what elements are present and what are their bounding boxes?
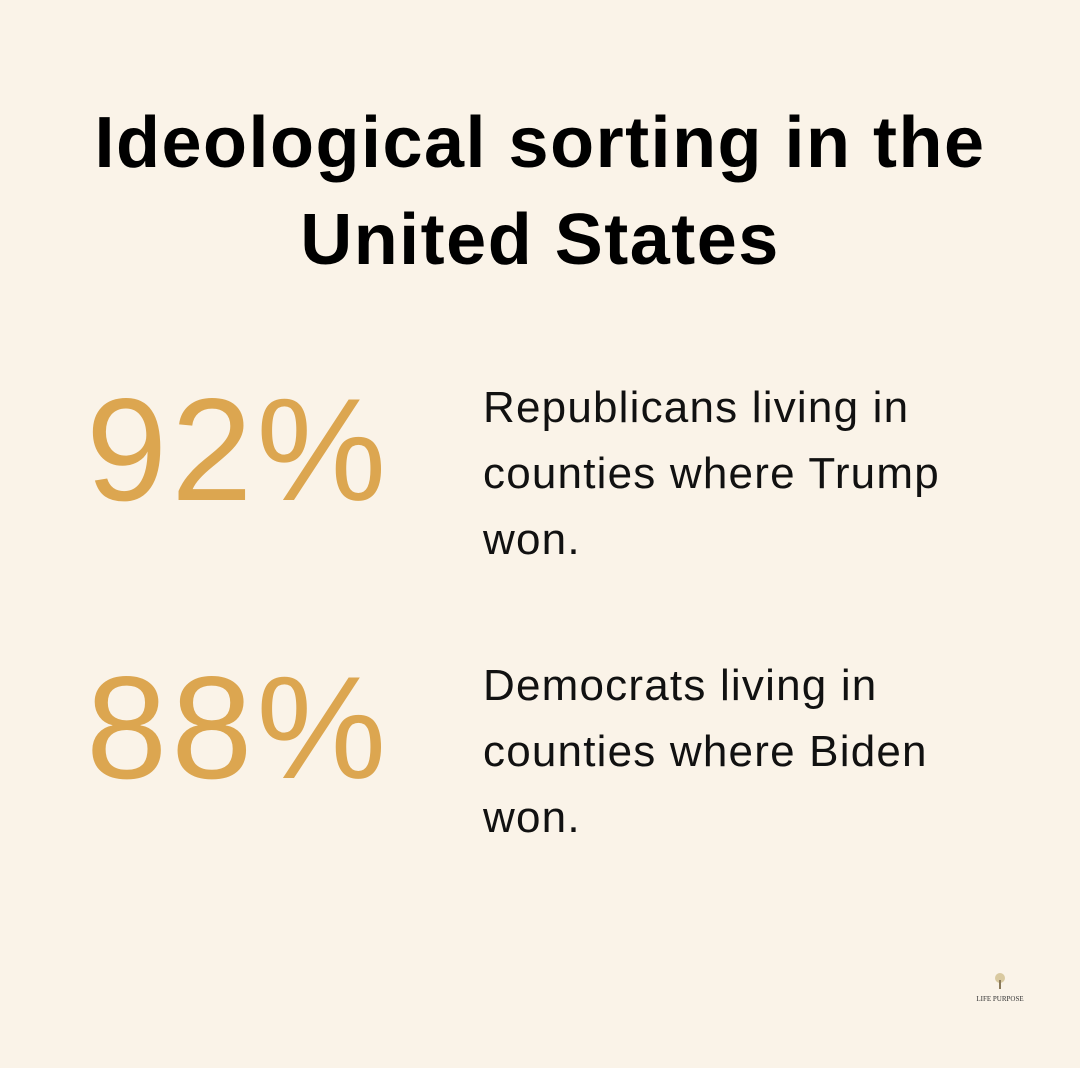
logo — [976, 973, 1024, 1003]
text: Democrats: won. — [483, 793, 581, 842]
text: Republicans: Republicans living in — [483, 383, 909, 432]
title: Ideological sorting in the — [94, 103, 986, 183]
title — [94, 103, 986, 280]
text: Republicans: won. — [483, 515, 581, 564]
text: Democrats: counties where Biden — [483, 727, 928, 776]
title: United States — [300, 200, 780, 280]
text: Democrats: Democrats living in — [483, 661, 877, 710]
stat: 88%: 88% — [86, 646, 390, 809]
stat: 92%: 92% — [86, 368, 390, 531]
text: Democrats — [483, 661, 928, 842]
logo: LIFE PURPOSE — [976, 995, 1024, 1003]
text: Republicans: counties where Trump — [483, 449, 940, 498]
text: Republicans — [483, 383, 940, 564]
